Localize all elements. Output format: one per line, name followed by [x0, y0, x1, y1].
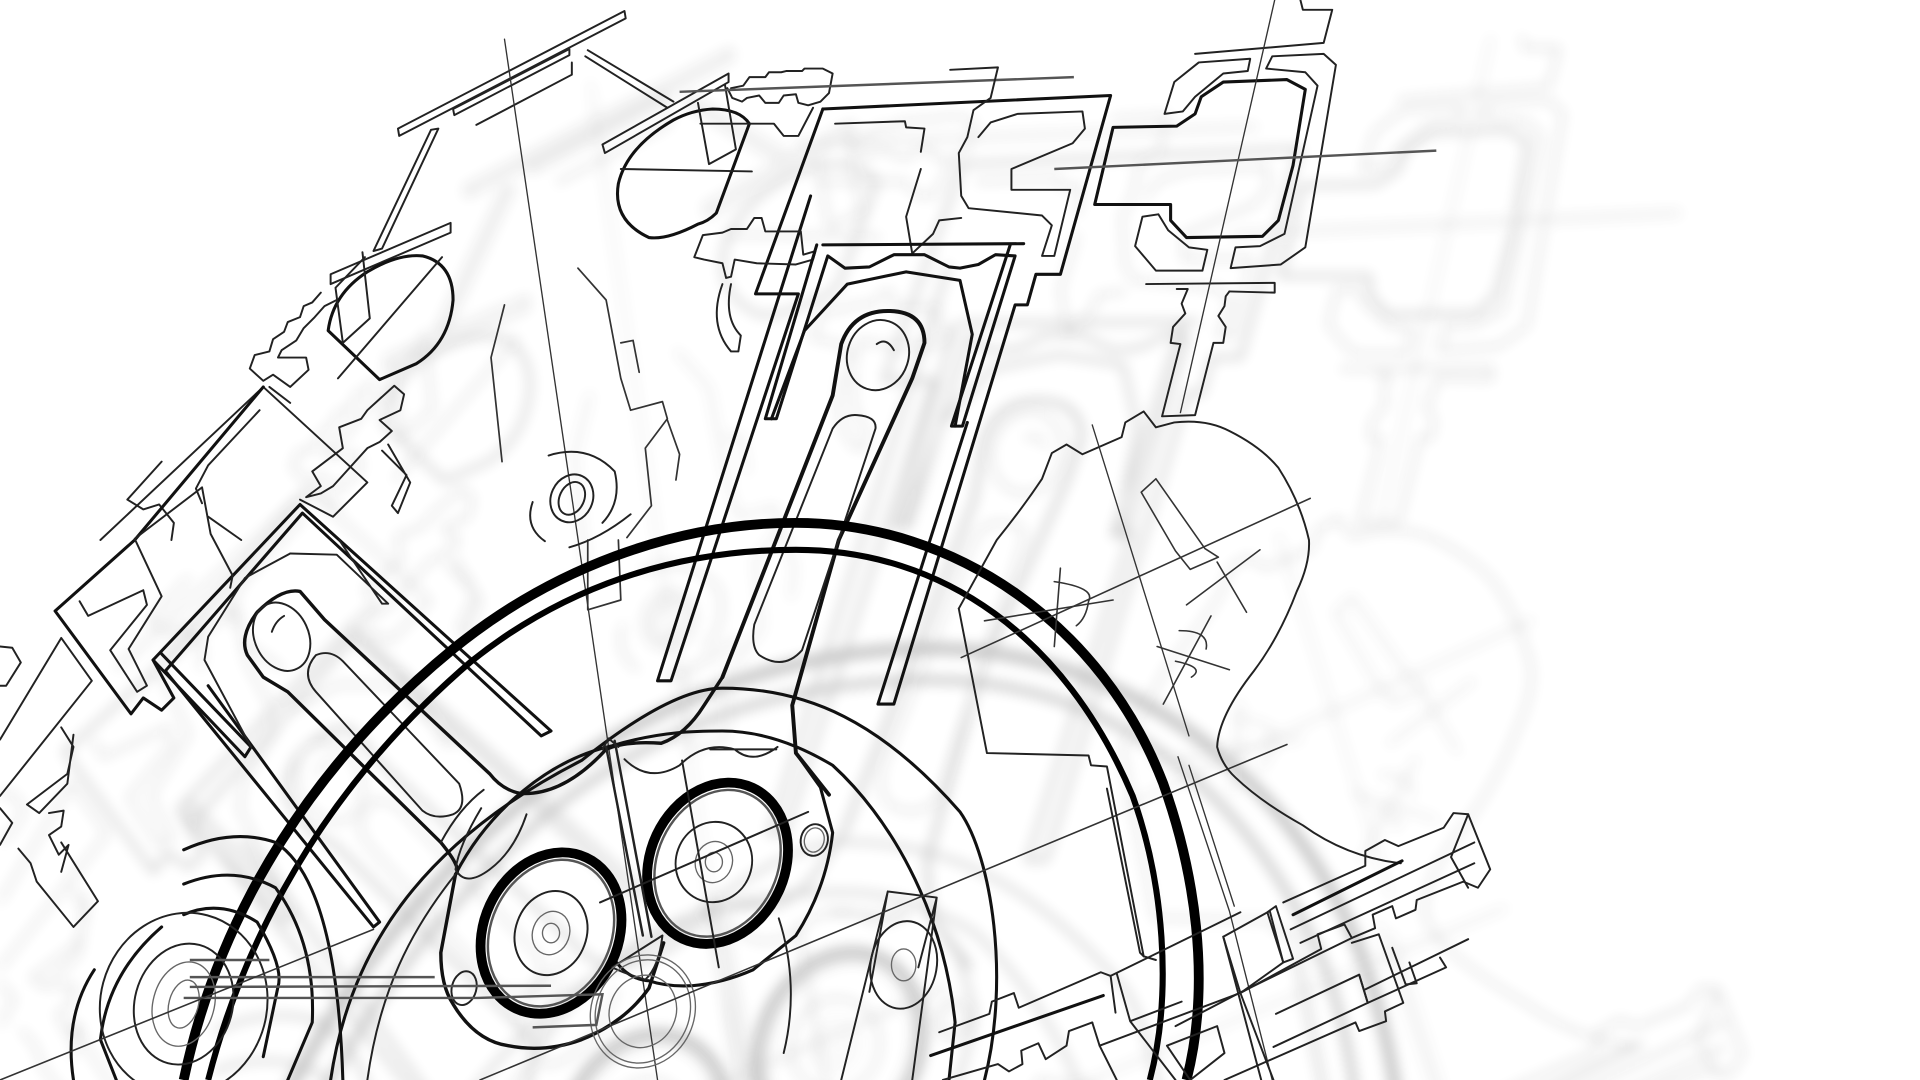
cam lobe details: [961, 479, 1310, 704]
centre divider bar: [602, 738, 662, 980]
lower centre concentric rings: [572, 938, 714, 1080]
left fitting and hook: [306, 386, 410, 513]
small concentric bearing near top of ring: [530, 452, 631, 547]
centre web fragments: [491, 268, 680, 610]
horizontal bar lines: [184, 960, 602, 1027]
long diagonal axis lines: [0, 744, 1287, 1080]
upper valve head: [617, 84, 813, 238]
crankshaft lower section: [1176, 934, 1468, 1080]
left bottom concentric bearing and arcs: [71, 837, 343, 1080]
top left rails: [331, 11, 729, 284]
crankshaft left section: [931, 912, 1240, 1080]
right port: [1054, 0, 1436, 416]
left serrated piece: [250, 293, 337, 387]
crankshaft upper section: [1223, 813, 1490, 993]
right bearing journal: [600, 759, 814, 967]
upper cylinder: [765, 244, 1024, 426]
main outer ring: [184, 523, 1199, 1080]
left connecting rod small end: [242, 593, 462, 817]
left bearing journal: [455, 829, 647, 1037]
upper horizontal axis: [680, 77, 1074, 92]
bolts: [448, 821, 831, 1008]
upper fitting: [694, 218, 816, 351]
left upper valve head: [328, 252, 453, 380]
far left fragments: [0, 638, 98, 927]
centre construction line: [504, 39, 658, 1080]
upper connecting rod: [245, 311, 924, 1048]
left engine block: [55, 387, 551, 927]
crank web arcs: [331, 688, 997, 1080]
upper engine block: [658, 67, 1111, 704]
main inner ring: [208, 550, 1163, 1080]
sharp engine drawing: [0, 0, 1490, 1080]
cam lobe outline: [959, 411, 1401, 1080]
upper serrated piece: [727, 69, 833, 105]
lower block with bearing: [841, 891, 944, 1080]
